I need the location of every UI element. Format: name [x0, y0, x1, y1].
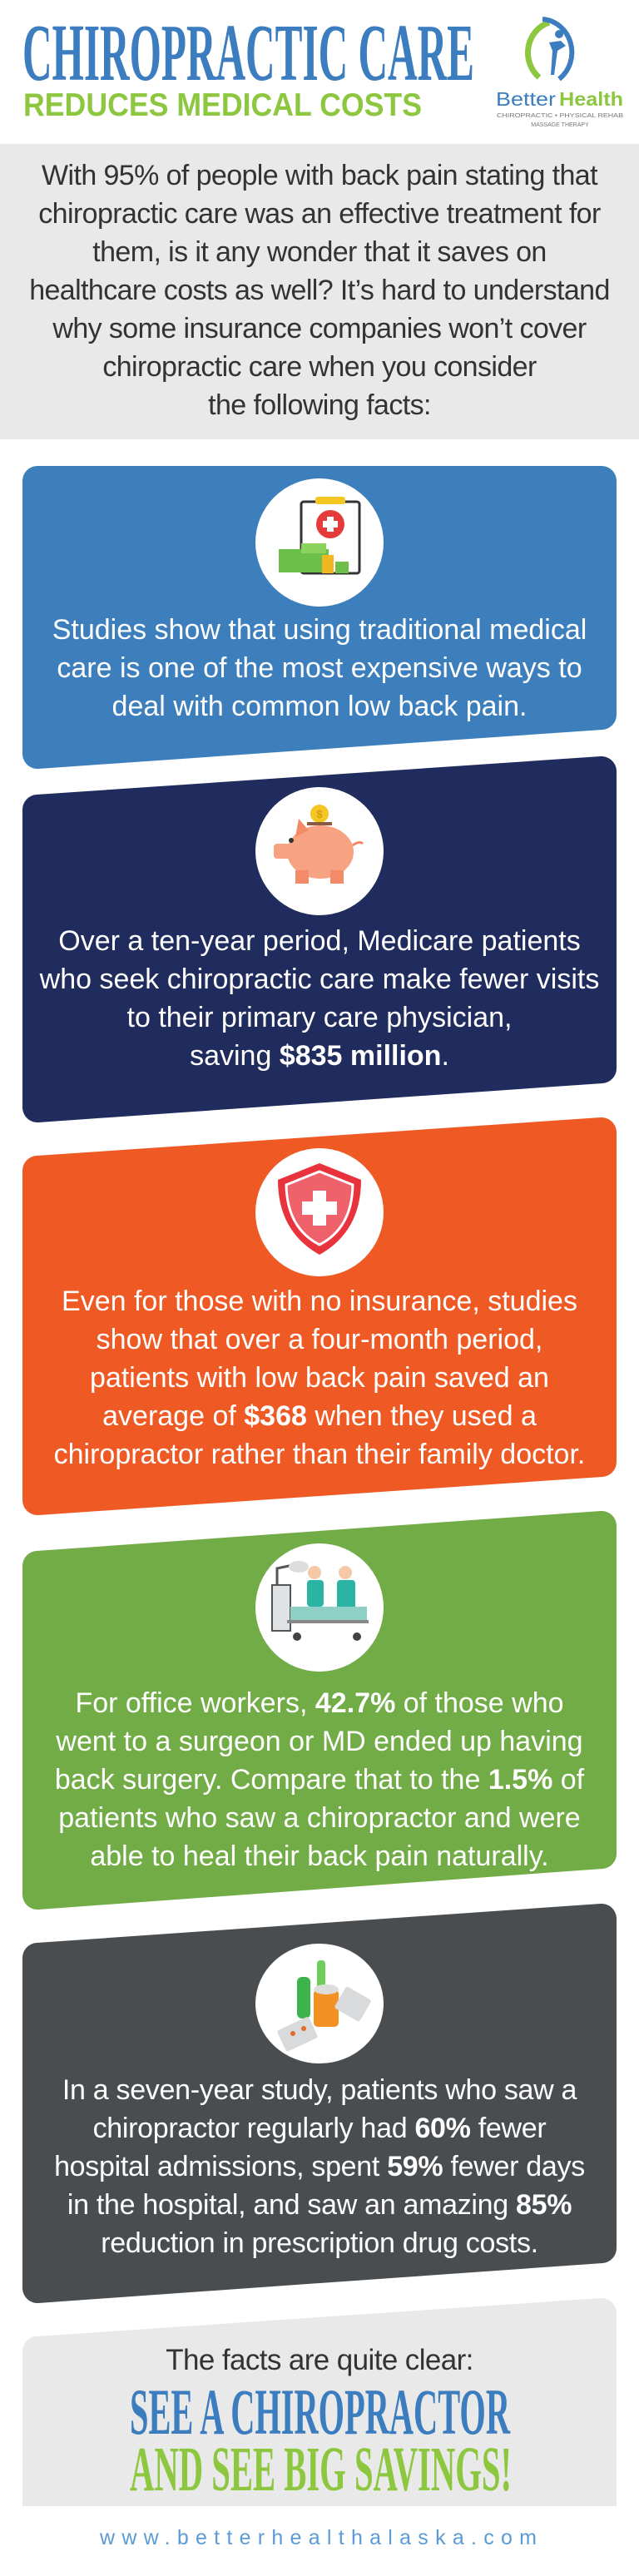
- footer url: www.betterhealthalaska.com: [99, 2526, 537, 2549]
- text: medical care: care is one of the most expensive ways to: [57, 652, 582, 684]
- icon: surgery team: [255, 1543, 384, 1672]
- text: surgery: patients who saw a chiropractor and were: [58, 1802, 581, 1834]
- icon: piggy bank: $: [316, 808, 323, 820]
- text: no insurance: patients with low back pain saved an: [90, 1362, 549, 1394]
- text: medical care: [52, 614, 587, 722]
- intro text: [29, 160, 610, 421]
- text: seven-year study: reduction in prescription drug costs.: [101, 2227, 538, 2259]
- text: surgery: able to heal their back pain naturally.: [90, 1840, 549, 1872]
- text: seven-year study: in the hospital, and saw an amazing 85%: [67, 2189, 572, 2221]
- text: seven-year study: [54, 2074, 585, 2259]
- text: no insurance: chiropractor rather than their family doctor.: [54, 1439, 585, 1470]
- logo: [496, 17, 623, 128]
- text: surgery: went to a surgeon or MD ended up having: [56, 1726, 583, 1757]
- logo: CHIROPRACTIC • PHYSICAL REHAB: [497, 113, 623, 119]
- text: medicare: saving $835 million.: [190, 1040, 449, 1072]
- text: medicare: Over a ten-year period, Medicare patients: [58, 925, 581, 957]
- intro panel: [0, 144, 639, 439]
- panel: medicare savings: [22, 756, 617, 1122]
- icon: shield: [255, 1148, 384, 1276]
- logo: Better: [496, 88, 556, 110]
- text: seven-year study: chiropractor regularly had 60% fewer: [93, 2113, 546, 2144]
- text: no insurance: [54, 1286, 585, 1470]
- intro text: chiropractic care was an effective treatment for: [38, 198, 601, 230]
- panel: no insurance: [22, 1117, 617, 1515]
- text: no insurance: Even for those with no insurance, studies: [62, 1286, 577, 1317]
- callout: see a chiropractor: [130, 2381, 512, 2498]
- intro text: them, is it any wonder that it saves on: [92, 236, 547, 268]
- text: no insurance: show that over a four-month period,: [97, 1324, 542, 1355]
- intro text: chiropractic care when you consider: [102, 351, 537, 383]
- text: medicare: to their primary care physician,: [127, 1002, 512, 1033]
- logo: Health: [559, 88, 623, 110]
- panel: conclusion: [22, 2298, 617, 2506]
- text: medical care: deal with common low back pain.: [112, 691, 527, 722]
- text: seven-year study: hospital admissions, spent 59% fewer days: [54, 2151, 585, 2182]
- title: REDUCES MEDICAL COSTS: [23, 87, 422, 123]
- text: medicare: who seek chiropractic care make fewer visits: [40, 964, 599, 995]
- icon: clipboard and money: [255, 478, 384, 607]
- panel: surgery: [22, 1511, 617, 1910]
- text: no insurance: average of $368 when they used a: [102, 1400, 537, 1432]
- intro text: With 95% of people with back pain stating that: [42, 160, 597, 191]
- text: surgery: For office workers, 42.7% of those who: [75, 1687, 564, 1719]
- panel: medical care cost: [22, 466, 617, 769]
- text: facts are clear: The facts are quite clear:: [166, 2344, 473, 2376]
- icon: medicine: [255, 1944, 384, 2063]
- text: surgery: [55, 1687, 584, 1872]
- intro text: healthcare costs as well? It’s hard to understand: [29, 275, 610, 306]
- intro text: the following facts:: [208, 389, 431, 421]
- logo: MASSAGE THERAPY: [531, 122, 589, 128]
- text: medicare: [40, 925, 599, 1072]
- icon: piggy bank: [255, 787, 384, 915]
- text: seven-year study: In a seven-year study, patients who saw a: [62, 2074, 577, 2106]
- intro text: why some insurance companies won’t cover: [52, 313, 587, 344]
- panel: seven-year study: [22, 1904, 617, 2303]
- text: medical care: Studies show that using traditional medical: [52, 614, 587, 646]
- text: surgery: back surgery. Compare that to the 1.5% of: [55, 1764, 584, 1796]
